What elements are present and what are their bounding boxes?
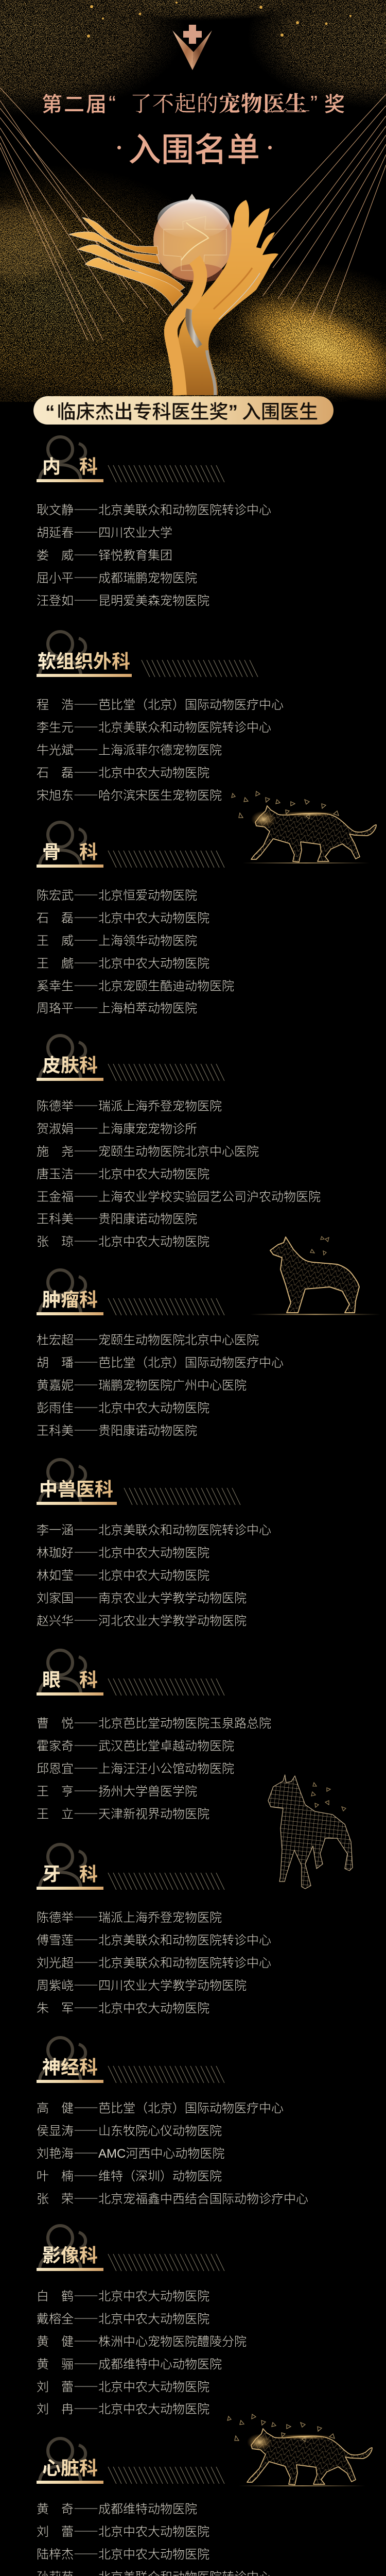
list: 眼科: 王 亨——扬州大学兽医学院 (37, 1781, 197, 1799)
list: 中兽医科: 李一涵——北京美联众和动物医院转诊中心 (37, 1520, 271, 1538)
list: 神经科: 刘艳海——AMC河西中心动物医院 (37, 2143, 224, 2161)
heading: 中兽医科 (37, 1458, 241, 1505)
list: 软组织外科: 牛光斌——上海派菲尔德宠物医院 (37, 740, 222, 758)
right hand (172, 200, 278, 395)
list: 肿瘤科: 彭雨佳——北京中农大动物医院 (37, 1398, 209, 1416)
list: 影像科: 黄 健——株洲中心宠物医院醴陵分院 (37, 2331, 247, 2349)
list: 神经科: 高 健——芭比堂（北京）国际动物医疗中心 (37, 2098, 284, 2116)
list: 牙科: 朱 军——北京中农大动物医院 (37, 1998, 209, 2016)
title line: 第二届“了不起的宠物医生”奖: ” (310, 91, 318, 115)
list: 软组织外科: 宋旭东——哈尔滨宋医生宠物医院 (37, 785, 222, 803)
list: 中兽医科 (37, 1520, 271, 1629)
panel: 骨科 (37, 821, 234, 1016)
list: 肿瘤科: 杜宏超——宠颐生动物医院北京中心医院 (37, 1330, 259, 1348)
list: 牙科: 周紫峣——四川农业大学教学动物医院 (37, 1975, 247, 1993)
heading: 肿瘤科: 肿瘤科 (42, 1285, 98, 1312)
title line: 第二届“了不起的宠物医生”奖 (42, 87, 345, 118)
light rays right (261, 94, 386, 322)
list: 骨科: 周珞平——上海柏萃动物医院 (37, 998, 197, 1016)
heading: 软组织外科 (37, 630, 258, 677)
list: 内科: 娄 威——铎悦教育集团 (37, 545, 172, 563)
list: 骨科: 奚幸生——北京宠颐生酷迪动物医院 (37, 976, 234, 994)
subtitle: 入围名单: 入围名单 (128, 124, 260, 171)
list: 皮肤科: 贺淑娟——上海康宠宠物诊所 (37, 1118, 197, 1137)
title line: 第二届“了不起的宠物医生”奖: “ (109, 91, 116, 115)
stem highlights (171, 260, 260, 395)
heading: 骨科 (37, 821, 224, 868)
panel: 心脏科 (37, 2437, 271, 2576)
heading: 软组织外科: 软组织外科 (38, 647, 130, 673)
heading: 牙科: 牙 科 (42, 1859, 98, 1886)
list: 内科: 汪登如——昆明爱美森宠物医院 (37, 590, 209, 608)
list: 内科: 胡延春——四川农业大学 (37, 522, 172, 540)
list: 中兽医科: 赵兴华——河北农业大学教学动物医院 (37, 1611, 247, 1629)
panel: 牙科 (37, 1843, 271, 2016)
list: 影像科 (37, 2286, 247, 2417)
list: 牙科 (37, 1907, 271, 2016)
list: 牙科: 刘光超——北京美联众和动物医院转诊中心 (37, 1953, 271, 1971)
list: 肿瘤科: 王科美——贵阳康诺动物医院 (37, 1420, 197, 1438)
list: 骨科: 王 威——上海领华动物医院 (37, 930, 197, 948)
heading: 影像科 (37, 2224, 224, 2271)
list: 内科: 屈小平——成都瑞鹏宠物医院 (37, 568, 197, 586)
list: 皮肤科 (37, 1096, 321, 1249)
heading: 牙科 (37, 1843, 224, 1890)
list: 内科 (37, 500, 271, 608)
list: 神经科: 侯显涛——山东牧院心仪动物医院 (37, 2121, 222, 2139)
list: 软组织外科: 李生元——北京美联众和动物医院转诊中心 (37, 717, 271, 735)
list: 肿瘤科 (37, 1330, 284, 1438)
light rays left (0, 88, 167, 341)
list: 神经科: 张 荣——北京宠福鑫中西结合国际动物诊疗中心 (37, 2189, 308, 2207)
list: 影像科: 刘 蕾——北京中农大动物医院 (37, 2377, 209, 2395)
list: 影像科: 白 鹤——北京中农大动物医院 (37, 2286, 209, 2304)
list: 肿瘤科: 胡 璠——芭比堂（北京）国际动物医疗中心 (37, 1352, 284, 1370)
list: 牙科: 傅雪莲——北京美联众和动物医院转诊中心 (37, 1930, 271, 1948)
list: 影像科: 刘 冉——北京中农大动物医院 (37, 2399, 209, 2417)
list: 皮肤科: 唐玉洁——北京中农大动物医院 (37, 1164, 209, 1182)
title line: 第二届“了不起的宠物医生”奖: 奖 (324, 88, 345, 117)
list: 眼科: 曹 悦——北京芭比堂动物医院玉泉路总院 (37, 1713, 271, 1731)
list: 皮肤科: 陈德举——瑞派上海乔登宠物医院 (37, 1096, 222, 1114)
heading: 眼科: 眼 科 (42, 1665, 98, 1692)
heading: 皮肤科: 皮肤科 (42, 1050, 98, 1077)
sparkles (87, 2, 352, 38)
panel: 肿瘤科 (37, 1268, 284, 1438)
award banner: 临床杰出专科医生奖: “临床杰出专科医生奖”入围医生 (45, 396, 318, 424)
heading: 骨科: 骨 科 (42, 837, 98, 864)
list: 眼科 (37, 1713, 271, 1822)
illustration: cat (231, 791, 377, 863)
trophy (69, 194, 278, 395)
list: 中兽医科: 林如莹——北京中农大动物医院 (37, 1565, 209, 1583)
title line: 第二届“了不起的宠物医生”奖: 了不起的宠物医生 (130, 87, 307, 118)
left hand fingers (69, 217, 185, 306)
list: 神经科: 叶 楠——维特（深圳）动物医院 (37, 2166, 222, 2184)
heading: 中兽医科: 中兽医科 (39, 1475, 113, 1501)
list: 软组织外科: 程 浩——芭比堂（北京）国际动物医疗中心 (37, 694, 284, 713)
list: 影像科: 戴榕全——北京中农大动物医院 (37, 2309, 209, 2327)
heading: 神经科: 神经科 (42, 2053, 98, 2079)
list: 心脏科: 陆梓杰——北京中农大动物医院 (37, 2544, 209, 2562)
list: 中兽医科: 林珈好——北京中农大动物医院 (37, 1543, 209, 1561)
heading: 影像科: 影像科 (42, 2241, 98, 2267)
list: 眼科: 霍家奇——武汉芭比堂卓越动物医院 (37, 1736, 234, 1754)
heading: 内科: 内 科 (42, 452, 98, 479)
illustration: wireframe dog (268, 1774, 353, 1889)
list: 影像科: 黄 骊——成都维特中心动物医院 (37, 2354, 222, 2372)
list: 中兽医科: 刘家国——南京农业大学教学动物医院 (37, 1588, 247, 1606)
list: 皮肤科: 王科美——贵阳康诺动物医院 (37, 1209, 197, 1227)
list: 骨科: 石 磊——北京中农大动物医院 (37, 908, 209, 926)
heading: 内科 (37, 435, 224, 482)
illustration: dog (253, 1236, 377, 1315)
panel: 中兽医科 (37, 1458, 271, 1629)
panel: 影像科 (37, 2224, 247, 2417)
heading: 心脏科 (37, 2437, 224, 2484)
list: 眼科: 邱恩宜——上海汪汪小公馆动物医院 (37, 1758, 234, 1776)
gold dust background (0, 0, 386, 433)
panel: 软组织外科 (37, 630, 284, 803)
list: 心脏科: 刘 蕾——北京中农大动物医院 (37, 2521, 209, 2539)
logo: cross and V (172, 25, 212, 70)
list: 骨科: 陈宏武——北京恒爱动物医院 (37, 885, 197, 903)
title line: 第二届“了不起的宠物医生”奖: 第二届 (42, 88, 108, 117)
list: 眼科: 王 立——天津新视界动物医院 (37, 1804, 209, 1822)
list: 牙科: 陈德举——瑞派上海乔登宠物医院 (37, 1907, 222, 1925)
panel: 皮肤科 (37, 1034, 321, 1249)
list: 心脏科 (37, 2499, 271, 2576)
list: 骨科: 王 虤——北京中农大动物医院 (37, 953, 209, 971)
heading: 神经科 (37, 2036, 224, 2083)
list: 神经科 (37, 2098, 308, 2207)
list: 内科: 耿文静——北京美联众和动物医院转诊中心 (37, 500, 271, 518)
list: 皮肤科: 王金福——上海农业学校实验园艺公司沪农动物医院 (37, 1187, 321, 1205)
globe (153, 194, 234, 282)
list: 心脏科: 黄 奇——成都维特动物医院 (37, 2499, 197, 2517)
list: 肿瘤科: 黄嘉妮——瑞鹏宠物医院广州中心医院 (37, 1375, 247, 1393)
heading: 皮肤科 (37, 1034, 224, 1081)
panel: 神经科 (37, 2036, 308, 2207)
list: 皮肤科: 施 尧——宠颐生动物医院北京中心医院 (37, 1141, 259, 1159)
panel: 眼科 (37, 1649, 271, 1822)
heading: 心脏科: 心脏科 (42, 2453, 98, 2480)
illustration: cat (227, 2414, 373, 2486)
panel: 内科 (37, 435, 271, 608)
heading: 肿瘤科 (37, 1268, 224, 1315)
list: 骨科 (37, 885, 234, 1016)
list: 软组织外科 (37, 694, 284, 803)
list: 软组织外科: 石 磊——北京中农大动物医院 (37, 762, 209, 781)
heading: 眼科 (37, 1649, 224, 1696)
list: 皮肤科: 张 琼——北京中农大动物医院 (37, 1231, 209, 1249)
